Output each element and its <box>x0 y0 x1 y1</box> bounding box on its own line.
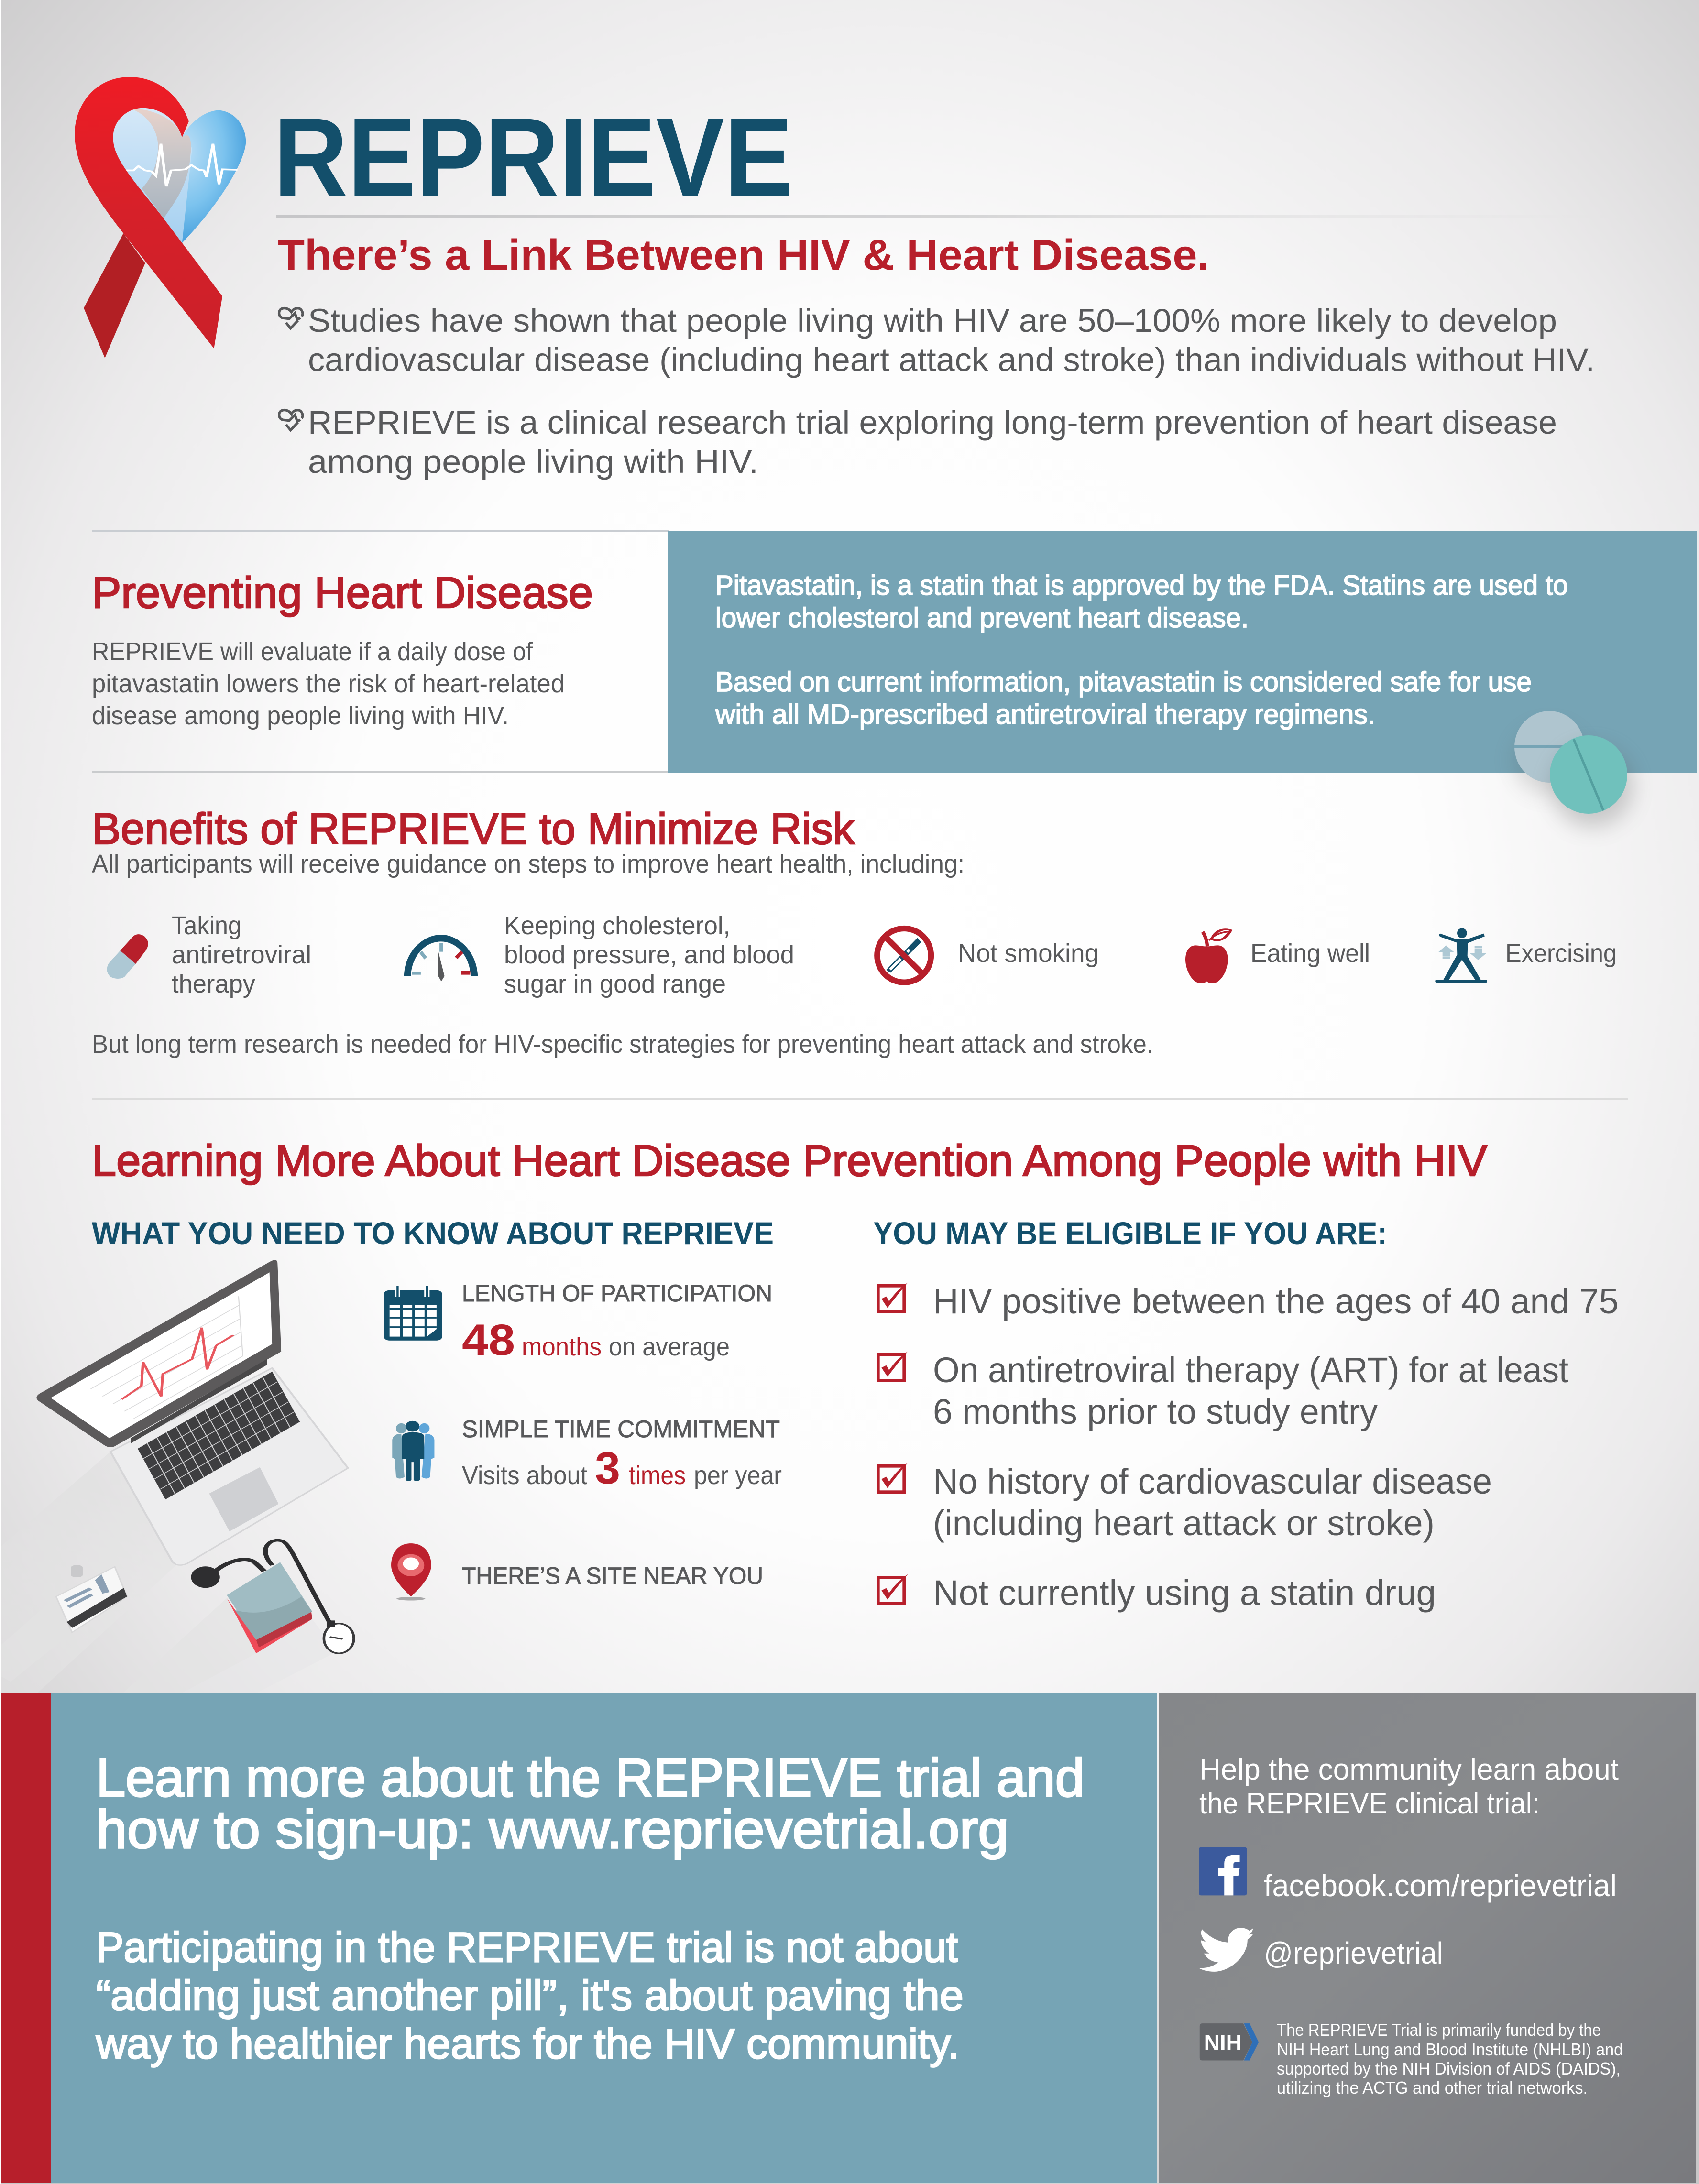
text block <box>92 637 565 730</box>
id badge <box>56 1565 127 1632</box>
item 2: 6 months prior to study entry <box>933 1392 1378 1431</box>
funding note: The REPRIEVE Trial is primarily funded by the <box>1277 2020 1601 2040</box>
label: LENGTH OF PARTICIPATION <box>462 1280 772 1307</box>
icon: capsule <box>107 934 148 979</box>
subheading: eligibility: YOU MAY BE ELIGIBLE IF YOU ARE: <box>873 1215 1387 1251</box>
number 48 months <box>462 1316 730 1365</box>
icon: calendar <box>384 1286 442 1341</box>
number 48 months: 48 <box>462 1316 515 1365</box>
item text: not smoking: Not smoking <box>958 939 1099 968</box>
eligibility list <box>878 1281 1619 1613</box>
number 48 months: on average <box>609 1332 730 1361</box>
intro text: All participants will receive guidance on steps to improve heart health, including: <box>92 850 965 878</box>
icon: exercising figure <box>1435 928 1487 983</box>
bullet text 1 <box>308 302 1595 378</box>
sign-up text <box>96 1748 1085 1859</box>
icon: gauge <box>404 935 478 982</box>
section rules <box>92 530 669 532</box>
icon: people <box>392 1421 434 1481</box>
item 3: (including heart attack or stroke) <box>933 1503 1435 1543</box>
facebook address: facebook.com/reprievetrial <box>1264 1868 1617 1903</box>
bullet text 2 <box>308 404 1557 480</box>
message text <box>96 1923 964 2067</box>
number 3 times: times <box>629 1461 686 1490</box>
funding note: supported by the NIH Division of AIDS (DAIDS), <box>1277 2059 1621 2078</box>
item text: cholesterol <box>504 911 794 998</box>
number 3 times: Visits about <box>462 1461 587 1490</box>
bullet points <box>279 302 1595 480</box>
item 3 <box>933 1462 1492 1543</box>
checkbox 1 <box>878 1282 908 1312</box>
checkbox 4 <box>878 1574 908 1604</box>
closing text: But long term research is needed for HIV-specific strategies for preventing heart attack and stroke. <box>92 1030 1153 1059</box>
item text: exercising: Exercising <box>1505 939 1617 968</box>
icon: twitter <box>1199 1928 1253 1972</box>
icon: apple <box>1185 928 1232 983</box>
text block <box>715 570 1568 730</box>
panel: preventing heart disease <box>92 568 593 730</box>
icon: heart bullet 2 <box>279 410 303 430</box>
bullet text 2: among people living with HIV. <box>308 443 758 480</box>
subheading: what you need to know: WHAT YOU NEED TO KNOW ABOUT REPRIEVE <box>92 1215 774 1251</box>
checkbox 2 <box>878 1351 908 1381</box>
message text: “adding just another pill”, it's about paving the <box>96 1972 964 2019</box>
text block: pitavastatin lowers the risk of heart-related <box>92 669 565 698</box>
message text: Participating in the REPRIEVE trial is not about <box>96 1923 958 1971</box>
icon: no smoking <box>877 928 931 983</box>
number 48 months: months <box>522 1332 602 1361</box>
item text: eating well: Eating well <box>1250 939 1370 968</box>
panel: red side bar <box>0 1693 51 2183</box>
panel: pitavastatin <box>668 531 1697 827</box>
item text: antiretroviral: Taking <box>172 911 241 940</box>
heading: Benefits of REPRIEVE to Minimize Risk <box>92 805 855 853</box>
item 2 <box>933 1350 1568 1431</box>
item 1: HIV positive between the ages of 40 and 75 <box>933 1281 1619 1321</box>
item: length of participation <box>384 1280 772 1365</box>
text block: lower cholesterol and prevent heart disease. <box>715 602 1249 633</box>
intro text <box>1199 1753 1619 1820</box>
item: time commitment <box>392 1416 782 1494</box>
icon: NIH logo <box>1200 2023 1259 2060</box>
laptop <box>36 1260 348 1565</box>
screen chart <box>91 1296 243 1419</box>
number 3 times: 3 <box>595 1443 620 1494</box>
sign-up text: how to sign-up: www.reprievetrial.org <box>96 1800 1009 1859</box>
text block: disease among people living with HIV. <box>92 701 509 730</box>
intro text: the REPRIEVE clinical trial: <box>1199 1787 1540 1820</box>
heading: learning more: Learning More About Heart Disease Prevention Among People with HIV <box>92 1136 1487 1185</box>
label: SIMPLE TIME COMMITMENT <box>462 1416 780 1442</box>
item text: cholesterol: blood pressure, and blood <box>504 940 794 969</box>
item text: antiretroviral: therapy <box>172 970 255 998</box>
logo: red ribbon with heart <box>75 77 246 358</box>
panel: call to action <box>51 1693 1157 2183</box>
number 3 times <box>462 1443 782 1494</box>
item 4: Not currently using a statin drug <box>933 1573 1436 1613</box>
text block: with all MD-prescribed antiretroviral therapy regimens. <box>715 699 1375 730</box>
bullet text 1: Studies have shown that people living with HIV are 50–100% more likely to develop <box>308 302 1557 339</box>
icon: facebook <box>1199 1847 1247 1895</box>
title: REPRIEVE <box>274 95 793 219</box>
icon: map pin <box>391 1543 431 1601</box>
panel: community <box>1159 1693 1696 2183</box>
bullet text 1: cardiovascular disease (including heart attack and stroke) than individuals without HIV. <box>308 341 1595 378</box>
icon: heart bullet 1 <box>279 308 303 328</box>
intro text: Help the community learn about <box>1199 1753 1619 1786</box>
label: THERE’S A SITE NEAR YOU <box>462 1562 763 1589</box>
item text: antiretroviral <box>172 911 311 998</box>
blood pressure cuff <box>191 1540 354 1653</box>
illustration: laptop, blood pressure cuff and badge <box>0 1260 354 1693</box>
text block: Based on current information, pitavastatin is considered safe for use <box>715 666 1532 698</box>
checkbox 3 <box>878 1463 908 1492</box>
text block: Pitavastatin, is a statin that is approved by the FDA. Statins are used to <box>715 570 1568 601</box>
funding note <box>1277 2020 1623 2097</box>
message text: way to healthier hearts for the HIV community. <box>96 2020 959 2067</box>
icon: NIH logo: NIH <box>1204 2031 1242 2055</box>
funding note: NIH Heart Lung and Blood Institute (NHLBI) and <box>1277 2040 1623 2059</box>
number 3 times: per year <box>694 1461 782 1490</box>
item text: antiretroviral: antiretroviral <box>172 940 311 969</box>
heading: Preventing Heart Disease <box>92 568 593 617</box>
item: site near you <box>391 1543 763 1601</box>
icon: two pills <box>1513 711 1633 827</box>
item text: cholesterol: sugar in good range <box>504 970 726 998</box>
subtitle: There’s a Link Between HIV & Heart Disease. <box>278 231 1209 279</box>
ECG line <box>124 144 238 186</box>
sign-up text: Learn more about the REPRIEVE trial and <box>96 1748 1085 1808</box>
funding note: utilizing the ACTG and other trial networks. <box>1277 2078 1588 2097</box>
item 3: No history of cardiovascular disease <box>933 1462 1492 1501</box>
bullet text 2: REPRIEVE is a clinical research trial exploring long-term prevention of heart disease <box>308 404 1557 441</box>
text block: REPRIEVE will evaluate if a daily dose of <box>92 637 533 666</box>
twitter handle: @reprievetrial <box>1264 1936 1443 1970</box>
item text: cholesterol: Keeping cholesterol, <box>504 911 730 940</box>
section: benefits <box>92 805 1617 1059</box>
item 2: On antiretroviral therapy (ART) for at least <box>933 1350 1568 1390</box>
